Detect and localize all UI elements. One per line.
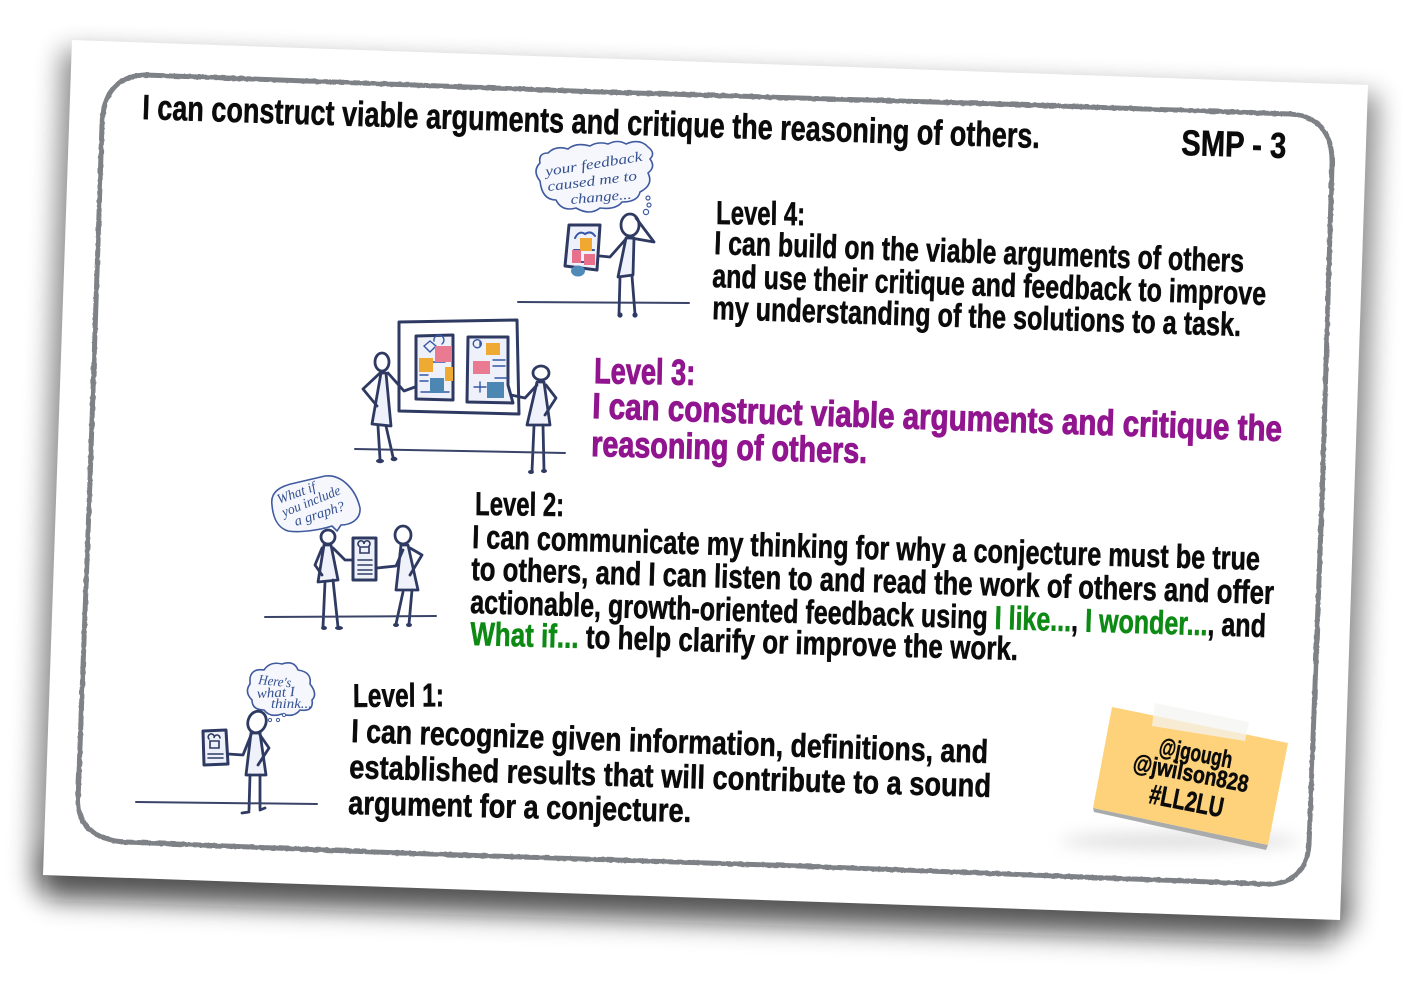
speech bubble: What if (275, 479, 320, 508)
thought cloud: your feedback (542, 150, 644, 180)
speech bubble: a graph? (293, 499, 347, 530)
tablet (565, 225, 600, 276)
sticky note shadow (1060, 833, 1300, 849)
thought cloud (247, 663, 315, 722)
left figure (363, 353, 415, 463)
level 2 body line 4: What if... to help clarify or improve the work. (470, 615, 1019, 667)
right poster with sticky notes (467, 337, 513, 403)
level 1 body line 2: established results that will contribute to a sound (349, 748, 992, 804)
title: I can construct viable arguments and critique the reasoning of others. (142, 88, 1041, 156)
speech bubble (272, 476, 360, 532)
figure (600, 214, 654, 318)
hand-drawn rounded frame (78, 75, 1332, 884)
illustration: level 4 person with tablet and thought cloud (518, 142, 689, 318)
thought cloud: change... (570, 188, 632, 208)
thought cloud: think... (271, 697, 312, 712)
level 2 body line 3: actionable, growth-oriented feedback using I like..., I wonder..., and (470, 583, 1267, 644)
panel: level 1 text (348, 676, 992, 829)
level 4 body line 3: my understanding of the solutions to a task. (712, 289, 1242, 343)
handle: jgough: @jgough (1157, 733, 1235, 774)
ground line (265, 616, 436, 617)
level 1 body line 1: I can recognize given information, definitions, and (351, 712, 989, 770)
thought cloud (536, 142, 653, 215)
shared paper (353, 538, 376, 580)
left poster with sticky notes (416, 335, 453, 400)
tape (1152, 703, 1249, 741)
paper (203, 730, 228, 765)
right figure (377, 526, 422, 627)
left figure (315, 530, 353, 630)
thought cloud: Here's (257, 673, 292, 691)
level 1 body line 3: argument for a conjecture. (348, 784, 692, 829)
illustration: level 1 person with paper and thought cloud (136, 663, 317, 813)
level 3 body line 2: reasoning of others. (591, 423, 868, 471)
handle: jwilson828: @jwilson828 (1131, 749, 1251, 798)
ground line (518, 302, 689, 303)
badge: SMP - 3: SMP - 3 (1181, 122, 1287, 166)
panel: level 3 text (591, 350, 1283, 471)
right figure (511, 366, 556, 474)
display board (399, 320, 519, 414)
level 1 heading: Level 1: (353, 676, 444, 714)
thought cloud: caused me to (547, 169, 638, 195)
illustration: level 2 two people with feedback bubble (265, 476, 436, 630)
figure (228, 709, 269, 813)
sticky note with credits (1093, 703, 1288, 850)
panel: level 4 text (712, 194, 1267, 343)
level 2 heading: Level 2: (475, 485, 564, 523)
speech bubble: you include (278, 484, 343, 521)
level 4 heading: Level 4: (716, 194, 805, 232)
level 3 heading: Level 3: (594, 350, 696, 393)
thought cloud: what I (256, 685, 297, 702)
illustration: level 3 two people presenting a board (355, 320, 565, 474)
panel: level 2 text (470, 485, 1275, 667)
ground line (136, 802, 317, 804)
ground line (355, 449, 565, 453)
level 4 body line 1: I can build on the viable arguments of others (714, 224, 1245, 279)
hashtag: #LL2LU (1147, 778, 1226, 823)
